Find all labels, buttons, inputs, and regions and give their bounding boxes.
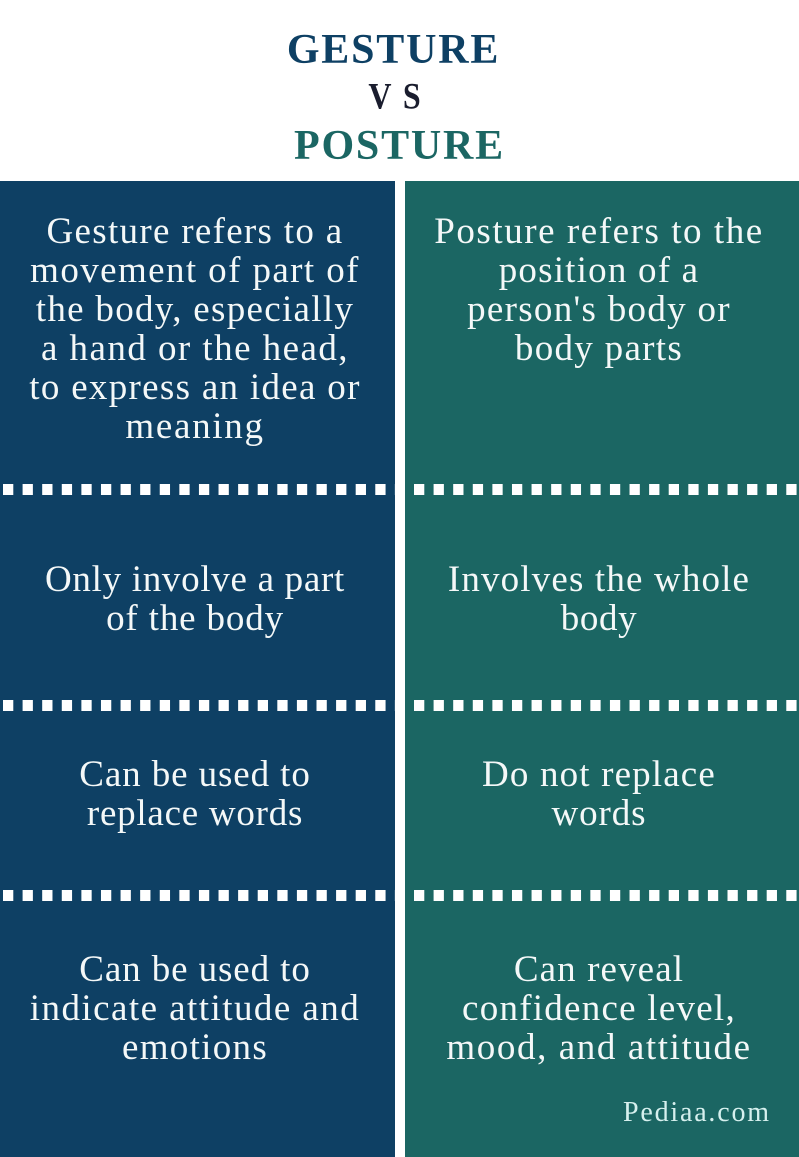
- text: gesture definition: the body, especially: [36, 289, 354, 330]
- text: gesture definition: a hand or the head,: [41, 328, 349, 369]
- text: posture definition: person's body or: [467, 289, 731, 330]
- divider row 2 right: [414, 700, 799, 711]
- text: gesture attitude: emotions: [122, 1027, 268, 1068]
- text: gesture definition: to express an idea or: [29, 367, 361, 408]
- text: gesture replaces words: replace words: [87, 793, 303, 834]
- text: gesture attitude: indicate attitude and: [30, 988, 360, 1029]
- text: posture does not replace words: words: [552, 793, 646, 834]
- divider row 3 right: [414, 890, 799, 901]
- text: posture involvement: body: [561, 598, 637, 639]
- text: posture reveals: Can reveal: [514, 949, 684, 990]
- text: posture definition: Posture refers to the: [434, 211, 764, 252]
- divider row 3 left: [3, 890, 395, 901]
- divider row 1 right: [414, 484, 799, 495]
- logo: Pediaa.com: Pediaa.com: [623, 1097, 771, 1128]
- text: posture definition: [434, 211, 764, 369]
- text: posture reveals: confidence level,: [462, 988, 736, 1029]
- text: posture reveals: [446, 949, 752, 1068]
- text: posture definition: body parts: [515, 328, 683, 369]
- text: posture does not replace words: [482, 754, 716, 834]
- divider row 2 left: [3, 700, 395, 711]
- panel: posture column: [405, 181, 799, 1157]
- text: gesture replaces words: Can be used to: [79, 754, 311, 795]
- divider row 1 left: [3, 484, 395, 495]
- title: Posture: POSTURE: [294, 123, 505, 169]
- text: posture involvement: Involves the whole: [448, 559, 750, 600]
- text: gesture definition: [29, 211, 361, 447]
- text: gesture definition: Gesture refers to a: [47, 211, 343, 252]
- text: gesture replaces words: [79, 754, 311, 834]
- text: gesture attitude: Can be used to: [79, 949, 311, 990]
- text: gesture definition: meaning: [125, 406, 265, 447]
- panel: gesture column: [0, 181, 395, 1157]
- title: Gesture: GESTURE: [287, 27, 500, 73]
- title: vs: V S: [368, 75, 423, 117]
- text: gesture involvement: [45, 559, 345, 639]
- text: posture definition: position of a: [499, 250, 699, 291]
- text: gesture definition: movement of part of: [30, 250, 360, 291]
- text: gesture involvement: of the body: [106, 598, 284, 639]
- text: posture does not replace words: Do not replace: [482, 754, 716, 795]
- text: gesture attitude: [30, 949, 360, 1068]
- text: posture reveals: mood, and attitude: [446, 1027, 752, 1068]
- text: posture involvement: [448, 559, 750, 639]
- text: gesture involvement: Only involve a part: [45, 559, 345, 600]
